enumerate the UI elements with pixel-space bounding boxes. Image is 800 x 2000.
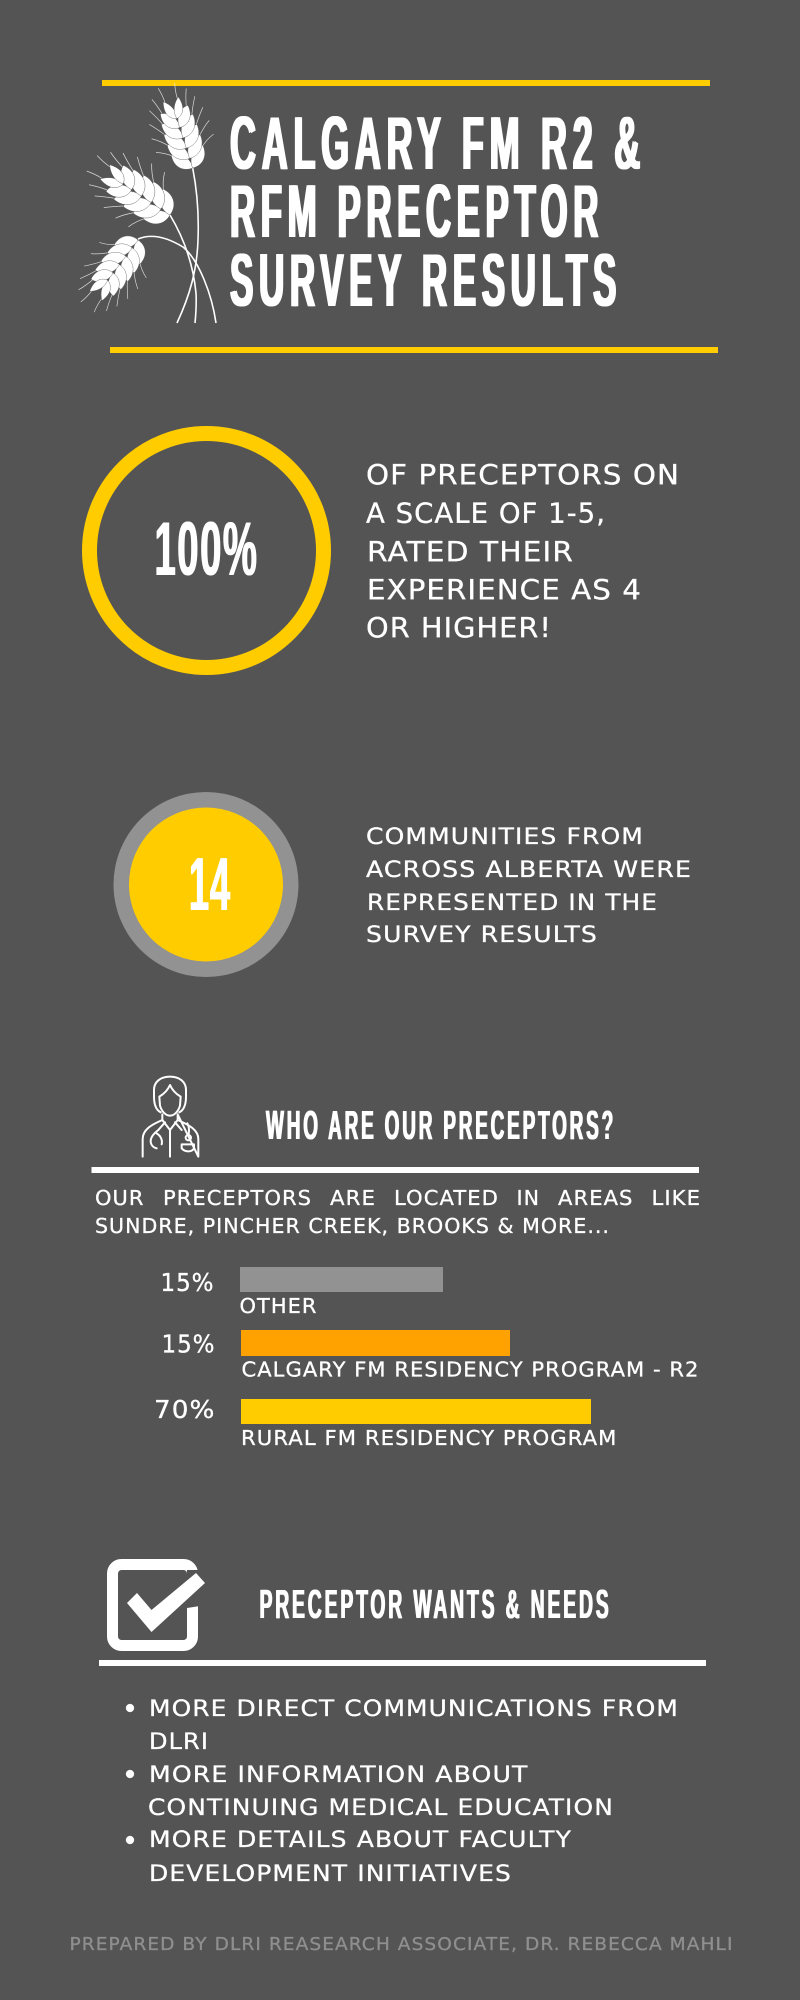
icon: checkbox: [112, 1564, 205, 1646]
text: preceptor locations: LOCATED: [394, 1186, 499, 1210]
text: preceptor locations: ARE: [330, 1186, 376, 1210]
text: preceptor locations: AREAS: [558, 1186, 634, 1210]
footer credit: PREPARED BY DLRI REASEARCH ASSOCIATE, DR. REBECCA MAHLI: [70, 1935, 733, 1955]
text: 100% description: RATED THEIR: [367, 537, 574, 568]
stat: 14 badge: [114, 792, 298, 977]
title: [229, 101, 645, 322]
bullet: continuing education: [126, 1762, 614, 1821]
text: 100% description: EXPERIENCE AS 4: [367, 575, 642, 606]
text: preceptor locations: OUR: [95, 1186, 144, 1210]
section rule: [99, 1660, 706, 1666]
bottom yellow rule: [110, 347, 718, 353]
text: preceptor locations: PRECEPTORS: [163, 1186, 312, 1210]
bar: rural FM residency: [154, 1395, 618, 1450]
bullet: communications: MORE DIRECT COMMUNICATIONS FROM: [149, 1696, 679, 1722]
bar: Calgary FM residency: 15%: [162, 1330, 216, 1358]
bullet: continuing education: MORE INFORMATION ABOUT: [149, 1762, 528, 1788]
text: communities description: ACROSS ALBERTA WERE: [366, 857, 692, 883]
text: communities description: COMMUNITIES FROM: [366, 824, 644, 850]
bullet list: wants and needs: [126, 1696, 679, 1887]
stat: 100% ring: [90, 434, 324, 668]
text: 100% description: [366, 460, 680, 644]
text: communities description: [366, 824, 692, 948]
text: preceptor locations: SUNDRE, PINCHER CREEK, BROOKS & MORE...: [95, 1214, 610, 1238]
text: 100% description: OR HIGHER!: [366, 613, 552, 644]
stat: 14 badge: 14: [188, 842, 230, 926]
icon: wheat stalks: [64, 76, 222, 325]
bullet: communications: DLRI: [149, 1729, 209, 1755]
bar: Calgary FM residency: [162, 1330, 700, 1382]
bar: other: OTHER: [240, 1294, 318, 1318]
top yellow rule: [102, 80, 710, 86]
bullet: communications: [126, 1696, 679, 1755]
bullet: faculty development: DEVELOPMENT INITIATIVES: [149, 1861, 512, 1887]
icon: doctor: [143, 1077, 198, 1157]
bar: rural FM residency: 70%: [154, 1395, 216, 1424]
text: communities description: SURVEY RESULTS: [366, 922, 598, 948]
text: preceptor locations: IN: [516, 1186, 540, 1210]
text: communities description: REPRESENTED IN THE: [367, 890, 658, 916]
stat: 100% ring: 100%: [154, 507, 258, 592]
bullet: continuing education: CONTINUING MEDICAL EDUCATION: [148, 1795, 614, 1821]
bar: rural FM residency: RURAL FM RESIDENCY PROGRAM: [241, 1426, 618, 1450]
text: 100% description: OF PRECEPTORS ON: [366, 460, 680, 491]
text: preceptor locations: [95, 1186, 701, 1238]
bar chart: program breakdown: [154, 1267, 700, 1450]
bar: Calgary FM residency: CALGARY FM RESIDENCY PROGRAM - R2: [242, 1358, 700, 1382]
bar: other: [160, 1267, 443, 1318]
section rule: [92, 1167, 699, 1173]
bar: other: 15%: [160, 1268, 214, 1297]
text: preceptor locations: LIKE: [652, 1186, 701, 1210]
bullet: faculty development: MORE DETAILS ABOUT FACULTY: [149, 1827, 572, 1853]
text: 100% description: A SCALE OF 1-5,: [366, 498, 606, 530]
bullet: faculty development: [126, 1827, 572, 1887]
